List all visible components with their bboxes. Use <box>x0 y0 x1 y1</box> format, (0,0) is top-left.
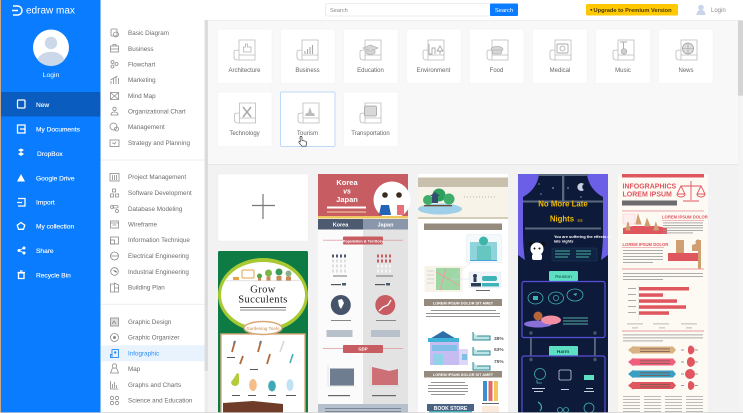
card: Medical: Medical <box>550 68 570 74</box>
footer columns <box>623 396 703 412</box>
intro paragraph <box>623 273 703 280</box>
card: Transportation: Transportation <box>351 131 390 137</box>
arrow list <box>628 346 676 390</box>
header <box>318 174 410 218</box>
tools box <box>221 334 305 413</box>
tabs <box>318 219 408 230</box>
group: charts and graphics <box>101 318 204 405</box>
login label: Login <box>43 72 60 79</box>
group: engineering: Wireframe <box>128 222 158 228</box>
title: zzz <box>577 218 583 222</box>
title: Grow <box>250 284 276 296</box>
group: engineering: Electrical Engineering <box>128 253 189 260</box>
binders <box>482 381 499 413</box>
header: vs <box>343 188 351 196</box>
left sidebar <box>0 0 100 413</box>
section 2: LOREM IPSUM DOLOR <box>622 242 668 247</box>
group: charts and graphics: Map <box>128 366 141 373</box>
search button: Search <box>495 8 513 14</box>
GDP tag <box>323 345 403 353</box>
search box: Search <box>330 8 348 14</box>
scrollbar <box>738 21 743 413</box>
card: Tourism (hovered) <box>280 92 335 146</box>
card: Business <box>280 29 335 84</box>
template: Korea vs Japan <box>318 174 410 413</box>
group: engineering: Software Development <box>128 190 192 197</box>
paragraph <box>623 334 703 341</box>
transport card <box>469 272 501 291</box>
chart captions <box>627 324 697 328</box>
nav: Recycle Bin: Recycle Bin <box>36 272 71 280</box>
active row: New: New <box>36 102 49 109</box>
search button <box>490 4 518 16</box>
population tag <box>323 236 403 244</box>
nav: Recycle Bin <box>18 271 71 280</box>
intro text: late nights <box>554 238 573 244</box>
heading bar 1 <box>424 224 502 230</box>
panda <box>529 242 545 260</box>
template: Grow Succulents <box>218 251 308 413</box>
footnote band <box>318 404 408 413</box>
nav: Google Drive <box>17 174 75 182</box>
header: Japan <box>336 195 358 204</box>
group: engineering: Project Management <box>128 174 186 181</box>
card: Music: Music <box>615 68 631 74</box>
group: engineering: Building Plan <box>128 284 165 292</box>
bed stats: 38% <box>494 336 504 342</box>
book store sign <box>427 404 474 413</box>
nav: DropBox <box>18 148 63 158</box>
nav: Import <box>17 198 55 206</box>
card: Tourism (hovered): Tourism <box>297 131 318 137</box>
group: general diagrams <box>110 29 190 147</box>
title: LOREM IPSUM <box>622 192 672 198</box>
card: Music <box>596 29 650 84</box>
intro text <box>552 234 612 261</box>
tag <box>244 322 282 334</box>
group: general diagrams: Business <box>128 46 154 53</box>
card: News: News <box>678 68 694 74</box>
tab: Reason <box>549 271 578 281</box>
group: engineering <box>110 174 192 292</box>
group: general diagrams: Mind Map <box>128 93 156 100</box>
group: engineering: Information Technique <box>128 237 190 244</box>
group: general diagrams: Organizational Chart <box>128 108 186 116</box>
nav: My collection: My collection <box>36 224 74 230</box>
logo: edraw max <box>26 6 75 16</box>
card: Food <box>470 29 524 84</box>
section 1 <box>623 214 708 234</box>
group: general diagrams: Marketing <box>128 77 156 84</box>
group: general diagrams: Flowchart <box>128 62 156 68</box>
bed stats: 53% <box>494 347 504 353</box>
title: INFOGRAPHICS <box>622 184 676 190</box>
map circles <box>326 295 400 337</box>
tag: Gardening Tools <box>247 326 280 331</box>
group: charts and graphics: Graphs and Charts <box>128 382 181 389</box>
tabs: Korea <box>333 222 349 228</box>
title <box>622 184 676 198</box>
card: Food: Food <box>490 68 503 74</box>
template: blank new <box>218 174 308 241</box>
tabs: Japan <box>378 222 394 228</box>
heading bar 3 <box>424 371 502 378</box>
icon: scales <box>677 181 705 201</box>
heading bar 3: LOREM IPSUM DOLOR SIT AMET <box>433 373 494 377</box>
window frame <box>523 174 603 230</box>
tab: Reason: Reason <box>555 274 572 280</box>
upgrade button: Upgrade to Premium Version <box>594 8 672 14</box>
nav: DropBox: DropBox <box>37 151 63 158</box>
title <box>538 200 588 224</box>
card: Business: Business <box>295 68 320 74</box>
group: charts and graphics: Graphic Organizer <box>128 334 179 342</box>
card: News <box>658 29 713 84</box>
section 2 <box>622 240 701 269</box>
bar chart <box>628 285 689 321</box>
nav: Share <box>18 246 54 255</box>
population pictograms <box>331 256 393 286</box>
group: charts and graphics: Graphic Design <box>128 319 172 326</box>
group: charts and graphics: Science and Education <box>128 398 193 404</box>
heading bar 2 <box>424 299 502 306</box>
nav: Google Drive: Google Drive <box>36 176 75 182</box>
nav: Share: Share <box>36 248 54 255</box>
avatar <box>33 30 69 66</box>
nav: My collection <box>17 222 74 230</box>
book store sign: BOOK STORE <box>434 406 468 412</box>
intro text: You are suffering the effects of <box>554 234 612 239</box>
group: general diagrams: Basic Diagram <box>128 30 169 37</box>
panel: harm <box>522 356 605 413</box>
grey banner <box>622 200 677 206</box>
category panel <box>100 20 208 413</box>
header <box>418 178 508 219</box>
template: Grow Succulents: Succulents <box>238 294 288 306</box>
selected row: Infographic: Infographic <box>128 350 159 358</box>
group: general diagrams: Management <box>128 124 165 131</box>
tab: Harm: Harm <box>557 349 569 355</box>
template: No More Late Nights <box>518 174 612 413</box>
population tag: Population & Territory <box>343 238 384 243</box>
panel: reason <box>522 282 605 338</box>
moon and stars <box>538 183 584 198</box>
plants row <box>226 268 300 281</box>
bed stats <box>473 332 504 370</box>
card: Education <box>344 29 398 84</box>
group: engineering: Database Modeling <box>128 206 183 213</box>
bed stats: 75% <box>494 359 504 365</box>
connector bars <box>530 338 596 357</box>
card: Environment: Environment <box>417 68 451 74</box>
footer band <box>223 401 283 413</box>
nav: My Documents <box>18 125 81 134</box>
card: Technology <box>218 92 272 146</box>
title: No More Late <box>538 200 588 208</box>
hospital illustration <box>428 331 468 365</box>
curtains <box>518 174 608 260</box>
card: Education: Education <box>357 68 384 74</box>
login link <box>696 5 726 15</box>
tab: Harm <box>549 346 578 356</box>
upgrade button <box>586 4 678 16</box>
card: Transportation <box>344 92 398 146</box>
active row: New <box>1 92 100 116</box>
nav: My Documents: My Documents <box>36 126 81 134</box>
top bar <box>100 0 743 21</box>
category cards area <box>208 21 743 413</box>
half-circle stats <box>681 346 698 390</box>
card: Technology: Technology <box>229 131 260 137</box>
icon: hand cursor <box>299 136 306 146</box>
card: Environment <box>406 29 461 84</box>
body text 2 <box>428 382 468 395</box>
title: Nights <box>550 214 575 224</box>
section 1: LOREM IPSUM DOLOR <box>662 214 708 220</box>
card: Architecture: Architecture <box>228 68 261 74</box>
area charts <box>328 365 400 396</box>
nav: Import: Import <box>36 200 55 206</box>
group: general diagrams: Strategy and Planning <box>128 140 190 147</box>
template: Infographics Lorem Ipsum <box>618 174 708 413</box>
map card <box>424 263 470 292</box>
GDP tag: GDP <box>358 346 368 352</box>
icon: plus <box>252 194 275 219</box>
card: Architecture <box>218 29 272 84</box>
card: Medical <box>532 29 587 84</box>
body text 1 <box>426 310 500 317</box>
heading bar 2: LOREM IPSUM DOLOR SIT AMET <box>433 302 494 306</box>
template: travel beige <box>418 174 508 413</box>
group: engineering: Industrial Engineering <box>128 269 189 276</box>
building card <box>466 234 502 262</box>
search box <box>326 4 490 16</box>
login link: Login <box>711 8 726 14</box>
header: Korea <box>336 178 358 187</box>
